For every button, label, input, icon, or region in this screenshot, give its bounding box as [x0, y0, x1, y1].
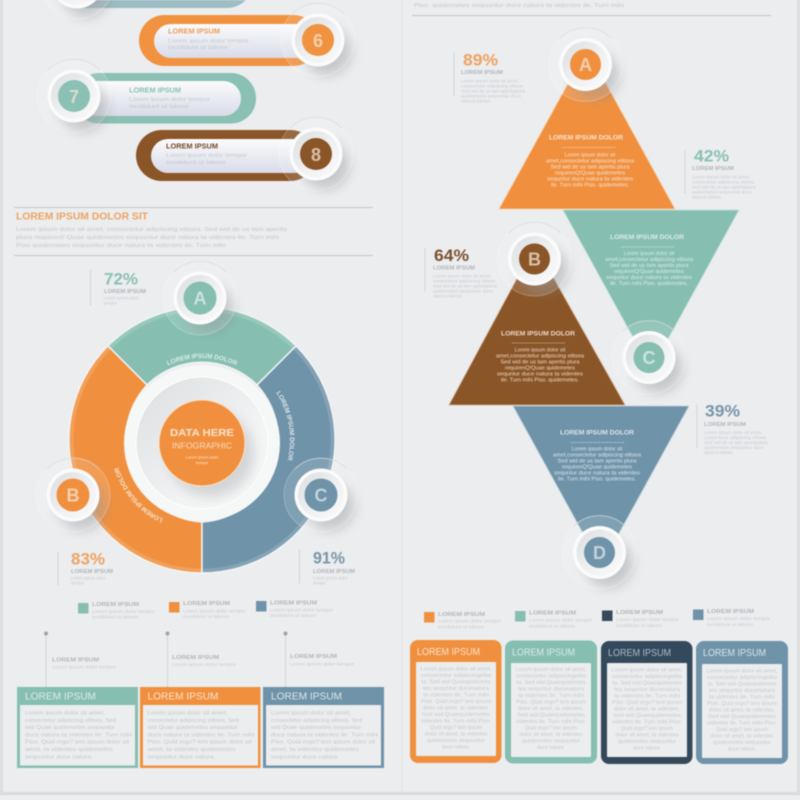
legend: right: LOREM IPSUM [529, 610, 576, 616]
triangle: brown B: B [528, 250, 541, 270]
legend: right: LOREM IPSUM [707, 609, 754, 615]
triangle: brown B: ile. Turn mihi Piso. quidemetes. [501, 378, 579, 384]
pill 7 [37, 59, 256, 133]
card: blue: sequuntur duce natura. [271, 754, 340, 760]
triangle: teal C [563, 210, 739, 394]
stat 64%: Sed wid de us tam apertisplura [433, 284, 498, 288]
triangle: teal C: LOREM IPSUM DOLOR [610, 234, 684, 241]
triangle: blue D: requirenQ!Quae quidemetes [562, 464, 632, 470]
stat 64% [425, 246, 498, 298]
stat 39%: natura ta videntes [704, 450, 733, 455]
heading block: left section: LOREM IPSUM DOLOR SIT [16, 212, 148, 222]
triangle: teal C: requirenQ!Quae quidemetes [614, 269, 684, 275]
rounded card: blue: Quid ergo? lem ipsum [716, 727, 769, 733]
stat 42%: LOREM IPSUM [692, 166, 734, 172]
stat 72%: LOREM IPSUM [104, 289, 146, 295]
stat 64%: quidemetes sequuntur duce [433, 288, 494, 294]
legend: right: incididunt ut labore [707, 622, 754, 627]
callout pins: LOREM IPSUM [290, 654, 337, 660]
rounded card: navy: dolor sit amet, ta videntes. [614, 706, 680, 712]
rounded card: orange: dolor sit amet, ta videntes [424, 732, 488, 738]
stat 39%: 39% [705, 402, 740, 420]
triangle: teal C: sequntur duce natura ta videntes [606, 275, 692, 281]
triangle: blue D: LOREM IPSUM DOLOR [560, 430, 634, 436]
card: teal: Piso. Quid ergo? lem ipsum dolor sit [25, 740, 130, 746]
segment: teal [108, 307, 296, 385]
stat 39%: quidemetes sequuntur duce [704, 445, 765, 450]
stat 64%: LOREM IPSUM [433, 266, 475, 272]
rounded card: blue: LOREM IPSUM [703, 647, 766, 659]
callout pins: LOREM IPSUM [52, 658, 99, 664]
stat 83% [58, 550, 113, 586]
stat 91%: Lorem ipsum dolor [313, 576, 348, 580]
stat 39%: Sed wid de us tam apertisplura [704, 440, 769, 445]
stat 89%: Sed wid de us tam apertisplura [461, 88, 526, 94]
triangle: orange A: sequntur duce natura ta videntes [547, 176, 633, 182]
rounded card: orange [410, 640, 502, 763]
card: orange: duce natura ta videntes ile. Turn mihi [148, 732, 254, 738]
rounded card: navy: Piso. Quid ergo? lem ipsum [612, 700, 683, 706]
rounded card: blue: ta videntes ile. Turn mihi [709, 694, 775, 700]
legend: right: LOREM IPSUM [438, 612, 485, 618]
card: orange: LOREM IPSUM [148, 690, 218, 702]
pill 6: incididunt ut labore [168, 45, 228, 51]
stat 39%: consectetur adipiscing elitsea [704, 435, 767, 440]
rounded card: navy: Sed wid Quaequidemetes [613, 713, 681, 719]
rounded card: teal: duce natura. [537, 745, 565, 751]
card: teal [17, 687, 138, 768]
rounded card: orange: videntes ile. Turn mihi Piso. [421, 718, 491, 724]
stat 64%: natura ta videntes [433, 294, 462, 298]
triangle: blue D: ile. Turn mihi Piso. quidemetes. [558, 476, 636, 482]
rounded card: navy: ta videntes ile. Turn mihi [614, 694, 680, 700]
heading block: left section: Piso quidemetes sequuntur duce natura ta videntes ile. Turn mihi [16, 243, 226, 249]
donut chart: LOREM IPSUM DOLOR [114, 467, 163, 524]
card: orange: sequuntur duce natura. [148, 754, 216, 760]
pill 8: Lorem ipsum dolor tempor [166, 153, 247, 159]
card: blue: Piso. Quid ergo? lem ipsum dolor sit [271, 740, 376, 746]
card: orange: wid Quae quidemetes sequuntur [146, 725, 238, 731]
rounded card: teal: ta. Sed wid Quaequidemes [516, 680, 586, 686]
card: blue: wid Quae quidemetes sequuntur [270, 725, 361, 731]
rounded card: orange: LOREM IPSUM [417, 646, 480, 658]
badge C [284, 458, 358, 532]
pill 6: 6 [313, 31, 323, 51]
card: teal: sequuntur duce natura. [25, 754, 94, 760]
stat 64%: Lorem ipsum dolor sit amet, [433, 274, 491, 278]
heading block: right section: Piso. quidemetes sequuntur duce natura ta videntes ile. Turn mihi [414, 3, 624, 9]
rounded card: teal: dolor sit amet, ta videntes. [518, 706, 584, 712]
triangle: blue D: Lorem ipsum dolor sit [572, 446, 623, 452]
stat 83%: LOREM IPSUM [71, 569, 113, 575]
rounded card: teal: consectetur adipiscingelita [516, 674, 586, 680]
stat 42%: Sed wid de us tam apertisplura [692, 184, 757, 190]
legend: right: LOREM IPSUM [616, 610, 663, 616]
rounded card: orange: Quid ergo? lem ipsum [430, 725, 483, 731]
legend: left: LOREM IPSUM [270, 600, 317, 606]
pill 5 cropped at top [40, 0, 253, 19]
triangle: teal C: amet,consectetur adipiscing elitsea [605, 257, 693, 263]
rounded card: teal: dolor sit amet, ta videntes [520, 732, 583, 738]
stat 42%: consectetur adipiscing elitsea [692, 180, 755, 184]
stat 91%: 91% [313, 548, 345, 568]
stat 89%: natura ta videntes [461, 98, 490, 104]
rounded card: navy: Quid ergo? lem ipsum [621, 726, 674, 732]
stat 83%: 83% [71, 550, 105, 568]
rounded card: navy [601, 641, 692, 764]
triangle: blue D: Sed wid de us tam apertis plura [558, 458, 637, 464]
rounded card: blue [696, 641, 788, 764]
triangle: orange A: amet,consectetur adipiscing elitsea [546, 158, 634, 164]
card: teal: LOREM IPSUM [25, 690, 96, 702]
rounded card: teal: Piso. Quid ergo? lem ipsum [516, 700, 587, 706]
rounded card: blue: dolor sit amet, ta videntes. [709, 708, 775, 714]
card: orange: consectetur adipiscing elitsea. Sed [148, 718, 238, 724]
triangle: orange A: requirenQ!Quae quidemetes [555, 170, 625, 176]
pill 7: Lorem ipsum dolor tempor [129, 97, 210, 103]
triangle: orange A: LOREM IPSUM DOLOR [549, 134, 623, 142]
stat 42% [685, 146, 757, 200]
rounded card: navy: videntes ile. Turn mihi Piso. [612, 720, 682, 726]
triangle: orange A: Lorem ipsum dolor sit [565, 152, 616, 158]
pill 8: LOREM IPSUM [166, 144, 218, 150]
card: teal: wid Quae quidemetes sequuntur [24, 725, 115, 731]
stat 64%: 64% [434, 246, 469, 265]
rounded card: blue: tes sequntur ducenatura [709, 688, 775, 694]
segment: blue [202, 346, 335, 573]
callout pins: Lorem ipsum dolor tempor [290, 662, 355, 666]
triangle: teal C: Sed wid de us tam apertis plura [610, 263, 689, 269]
center hub: INFOGRAPHIC [172, 442, 232, 450]
rounded card: blue: ta. Sed wid Quaequidemes [708, 682, 777, 688]
legend: right: incididunt ut labore [616, 623, 663, 628]
legend: right: incididunt ut labore [529, 624, 576, 628]
pill 6: LOREM IPSUM [168, 28, 220, 36]
pill 7: LOREM IPSUM [129, 88, 181, 94]
triangle: brown B: sequntur duce natura ta videntes [497, 372, 583, 378]
triangle: brown B: amet,consectetur adipiscing elitsea [496, 354, 584, 360]
rounded card: orange: dolor sit amet, ta videntes. [423, 706, 489, 712]
triangle: teal C: Lorem ipsum dolor sit [624, 251, 675, 257]
stat 89%: LOREM IPSUM [461, 70, 503, 76]
triangle: orange A: Sed wid de us tam apertis plura [550, 164, 630, 170]
rounded card: orange: Lorem ipsum dolor sit amet, [420, 666, 492, 672]
triangle: blue D [513, 406, 689, 590]
card: blue: consectetur adipiscing elitsea. Sed [271, 718, 362, 724]
stat 64%: consectetur adipiscing elitsea [433, 278, 496, 284]
stat 39% [697, 402, 769, 455]
rounded card: navy: dolor sit amet, ta videntes [616, 732, 679, 738]
rounded card: navy: consectetur adipiscingelita [612, 674, 682, 680]
pill 6: Lorem ipsum dolor tempor [168, 38, 249, 44]
badge A [163, 261, 237, 335]
rounded card: orange: consectetur adipiscingelita [421, 673, 491, 679]
card: blue: duce natura ta videntes ile. Turn mihi [271, 732, 378, 738]
card: teal: Lorem ipsum dolor sit amet, [25, 710, 106, 716]
stat 83%: tempor [71, 580, 85, 586]
stat 89%: Lorem ipsum dolor sit amet, [461, 78, 519, 84]
triangle: orange A: ile. Turn mihi Piso. quidemetes. [551, 182, 629, 188]
stat 72%: tempor [104, 300, 118, 306]
center hub: DATA HERE [170, 427, 234, 439]
rounded card: blue: videntes ile. Turn mihi Piso. [707, 720, 777, 726]
card: blue [263, 687, 384, 768]
pill 8: 8 [311, 145, 321, 165]
rounded card: orange: duce natura. [442, 744, 470, 750]
legend: right: Lorem ipsum dolor tempor [707, 616, 771, 621]
callout pins: Lorem ipsum dolor tempor [52, 664, 117, 670]
center hub [124, 365, 280, 521]
legend: right: incididunt ut labore [438, 624, 485, 630]
rounded card: blue: Sed wid Quaequidemetes [708, 714, 776, 720]
stat 91%: LOREM IPSUM [313, 569, 355, 575]
stat 89%: quidemetes sequuntur duce [461, 94, 522, 98]
heading block: right section [412, 0, 771, 16]
pill 7: 7 [69, 87, 79, 107]
legend: right [424, 609, 771, 630]
rounded card: teal: Lorem ipsum dolor sit amet, [516, 667, 586, 673]
card: teal: consectetur adipiscing elitsea. Sed [25, 718, 116, 724]
card: blue: amet, ta videntes quidemetes [271, 747, 359, 753]
rounded card: blue: quidemetes sequuntur [713, 740, 771, 746]
rounded card: teal: Sed wid Quaequidemetes [517, 712, 585, 718]
triangle: teal C: ile. Turn mihi Piso. quidemetes. [610, 281, 688, 287]
rounded card: orange: quidemetes sequuntur [427, 738, 485, 744]
legend: right: Lorem ipsum dolor tempor [438, 618, 502, 624]
rounded card: navy: quidemetes sequuntur [618, 739, 676, 745]
rounded card: blue: Piso. Quid ergo? lem ipsum [707, 701, 778, 707]
donut chart: LOREM IPSUM DOLOR [276, 390, 295, 461]
rounded card: teal: quidemetes sequuntur [522, 738, 580, 744]
segment labels: LOREM IPSUM DOLOR [166, 353, 238, 366]
stat 42%: natura ta videntes [692, 194, 721, 200]
legend: left: LOREM IPSUM [183, 601, 230, 607]
triangle: teal C: C [642, 348, 656, 368]
rounded card: blue: dolor sit amet, ta videntes [710, 734, 774, 740]
card: orange: Lorem ipsum dolor sit amet, [148, 710, 228, 716]
rounded card: navy: tes sequntur ducenatura [614, 687, 680, 693]
donut chart [46, 262, 358, 573]
rounded card: teal: ta videntes ile. Turn mihi [518, 693, 584, 699]
rounded card: navy: Lorem ipsum dolor sit amet, [612, 668, 682, 674]
triangle: blue D: amet,consectetur adipiscing elitsea [553, 452, 641, 458]
segment: orange [69, 346, 202, 573]
triangle: brown B [449, 222, 625, 405]
rounded card: teal [505, 640, 597, 764]
badge B [36, 458, 110, 532]
stat 72%: Lorem ipsum dolor [104, 296, 139, 300]
triangle: brown B: Lorem ipsum dolor sit [515, 348, 566, 354]
legend: left: Lorem ipsum dolor tempor [92, 609, 156, 614]
stat 91% [300, 548, 355, 586]
center hub: tempor [196, 460, 209, 465]
triangle: brown B: LOREM IPSUM DOLOR [501, 330, 575, 338]
rounded card: orange: Sed wid Quaequidemetes [422, 712, 490, 718]
rounded card: teal: videntes ile. Turn mihi Piso. [516, 719, 586, 725]
heading block: left section [14, 207, 373, 256]
stat 72% [90, 270, 146, 306]
callout pins: Lorem ipsum dolor tempor [172, 662, 237, 667]
rounded card: teal: Quid ergo? lem ipsum [525, 726, 578, 732]
heading block: left section: plura requirenl! Quae quidemetes sequuntur duce natura ta videntes ile. Turn mihi [16, 235, 279, 241]
legend: left: incididunt ut labore [270, 613, 317, 618]
triangle: blue D: D [593, 543, 606, 563]
stat 42%: Lorem ipsum dolor sit amet, [692, 174, 750, 180]
rounded card: navy: ta. Sed wid Quaequidemes [612, 680, 682, 686]
badge C: C [314, 486, 328, 506]
stat 89% [454, 50, 526, 104]
stat 39%: Lorem ipsum dolor sit amet, [704, 430, 762, 435]
rounded card: blue: consectetur adipiscingelita [707, 675, 777, 681]
rounded card: teal: tes sequntur ducenatura [518, 686, 584, 692]
triangle: orange A [499, 28, 675, 209]
rounded card: orange: tes sequntur ducenatura [423, 686, 489, 692]
card: orange [140, 687, 260, 768]
legend: left [78, 600, 334, 620]
triangle: orange A: A [579, 55, 592, 75]
rounded card: navy: duce natura. [633, 746, 661, 752]
legend: right: Lorem ipsum dolor tempor [529, 618, 593, 622]
legend: left: Lorem ipsum dolor tempor [270, 608, 334, 612]
rounded card: blue: duce natura. [728, 746, 756, 752]
callout pins [44, 632, 355, 687]
legend: left: Lorem ipsum dolor tempor [183, 608, 247, 614]
card: blue: LOREM IPSUM [271, 690, 342, 702]
card: orange: amet, ta videntes quidemetes [148, 747, 236, 753]
card: blue: Lorem ipsum dolor sit amet, [271, 710, 352, 716]
rounded card: orange: ta. Sed wid Quaequidemes [422, 680, 491, 686]
pill 8: incididunt ut labore [166, 160, 226, 166]
triangle: blue D: sequntur duce natura ta videntes [554, 470, 640, 476]
pill 8 [136, 117, 353, 191]
stat 83%: Lorem ipsum dolor [71, 576, 106, 580]
rounded card: navy: LOREM IPSUM [608, 647, 671, 659]
legend: left: incididunt ut labore [92, 614, 139, 620]
pill 6 [139, 3, 355, 77]
card: orange: Piso. Quid ergo? lem ipsum dolor sit [148, 740, 252, 746]
rounded card: blue: Lorem ipsum dolor sit amet, [706, 668, 778, 674]
stat 42%: quidemetes sequuntur duce [692, 190, 753, 194]
heading block: left section: Lorem ipsum dolor sit amet, consectetur adipiscing elitsea. Sed wid de us tam apertis [16, 227, 287, 233]
rounded card: teal: LOREM IPSUM [512, 646, 575, 658]
legend: left: LOREM IPSUM [92, 602, 139, 608]
card: teal: amet, ta videntes quidemetes [25, 747, 113, 753]
triangle: brown B: requirenQ!Quae quidemetes [505, 366, 575, 372]
badge B: B [66, 486, 80, 506]
center hub: Lorem ipsum dolor [185, 454, 219, 460]
triangle: brown B: Sed wid de us tam apertis plura [500, 360, 580, 366]
rounded card: orange: ta videntes ile. Turn mihi [423, 692, 489, 698]
card: teal: duce natura ta videntes ile. Turn mihi [25, 732, 132, 738]
badge A: A [194, 288, 206, 308]
stat 72%: 72% [104, 270, 138, 288]
legend: left: incididunt ut labore [183, 614, 230, 619]
pill 7: incididunt ut labore [129, 104, 189, 110]
stat 89%: 89% [463, 50, 498, 70]
panel: numbered pills [37, 0, 355, 191]
stat 42%: 42% [694, 146, 729, 166]
stat 89%: consectetur adipiscing elitsea [461, 84, 524, 88]
callout pins: LOREM IPSUM [172, 655, 219, 661]
rounded card: orange: Piso. Quid ergo? lem ipsum [421, 699, 492, 705]
stat 91%: tempor [313, 580, 327, 586]
legend: right: Lorem ipsum dolor tempor [616, 617, 680, 622]
stat 39%: LOREM IPSUM [704, 422, 746, 428]
